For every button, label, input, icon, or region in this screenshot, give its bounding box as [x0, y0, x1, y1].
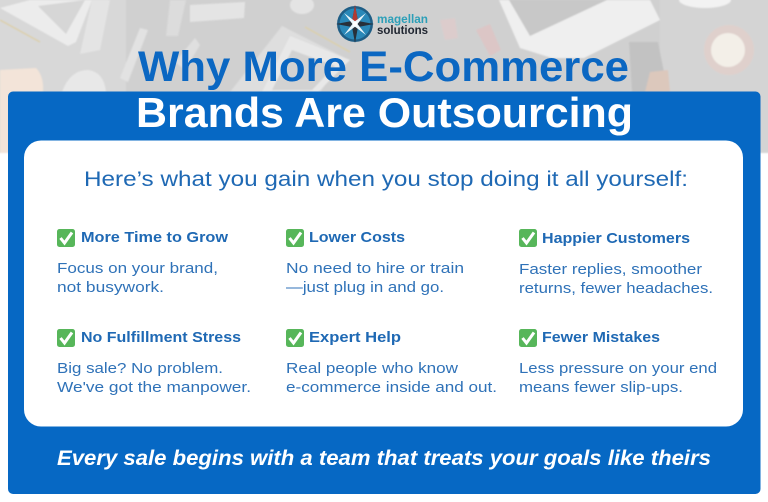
- benefit: More Time to Grow: [57, 229, 228, 296]
- benefit: Expert Help: Real people who know: [286, 360, 458, 377]
- benefit: Expert Help: e-commerce inside and out.: [286, 379, 497, 396]
- title line 2: Brands Are Outsourcing: [136, 89, 633, 136]
- background photo: desk with laptops: [0, 0, 768, 153]
- benefit: Happier Customers: Happier Customers: [542, 230, 690, 247]
- benefit: No Fulfillment Stress: We've got the manpower.: [57, 379, 251, 396]
- icon: check mark: [57, 229, 75, 247]
- logo: Magellan Solutions: [336, 5, 428, 43]
- benefit: More Time to Grow: More Time to Grow: [81, 229, 228, 246]
- benefit: Lower Costs: —just plug in and go.: [286, 279, 444, 296]
- benefit: Fewer Mistakes: Fewer Mistakes: [542, 329, 660, 346]
- benefit: Happier Customers: [519, 229, 713, 297]
- benefit: Happier Customers: returns, fewer headaches.: [519, 280, 713, 297]
- benefit: Lower Costs: Lower Costs: [309, 229, 405, 246]
- closing tagline: Every sale begins with a team that treats your goals like theirs: [57, 447, 711, 470]
- benefit: Expert Help: Expert Help: [309, 329, 401, 346]
- subtitle: Here’s what you gain when you stop doing it all yourself:: [84, 168, 688, 191]
- benefit: Fewer Mistakes: [519, 329, 717, 396]
- benefit: Happier Customers: Faster replies, smoother: [519, 261, 702, 278]
- icon: compass: [336, 5, 374, 43]
- benefit: No Fulfillment Stress: Big sale? No problem.: [57, 360, 223, 377]
- benefit: Lower Costs: No need to hire or train: [286, 260, 464, 277]
- icon: check mark: [519, 229, 537, 247]
- benefit: Fewer Mistakes: Less pressure on your end: [519, 360, 717, 377]
- panel: white benefits card: [24, 140, 743, 426]
- benefit: More Time to Grow: Focus on your brand,: [57, 260, 218, 277]
- icon: check mark: [519, 329, 537, 347]
- icon: check mark: [286, 229, 304, 247]
- icon: check mark: [57, 329, 75, 347]
- benefit: Lower Costs: [286, 229, 464, 296]
- icon: check mark: [286, 329, 304, 347]
- benefit: Expert Help: [286, 329, 497, 396]
- panel: blue card: [8, 89, 760, 494]
- benefit: More Time to Grow: not busywork.: [57, 279, 164, 296]
- logo: Magellan Solutions: magellan: [377, 14, 428, 26]
- benefit: No Fulfillment Stress: [57, 329, 251, 396]
- title line 1: Why More E-Commerce: [138, 43, 629, 91]
- benefit: Fewer Mistakes: means fewer slip-ups.: [519, 379, 683, 396]
- logo: Magellan Solutions: solutions: [377, 25, 428, 37]
- benefit: No Fulfillment Stress: No Fulfillment Stress: [81, 329, 241, 346]
